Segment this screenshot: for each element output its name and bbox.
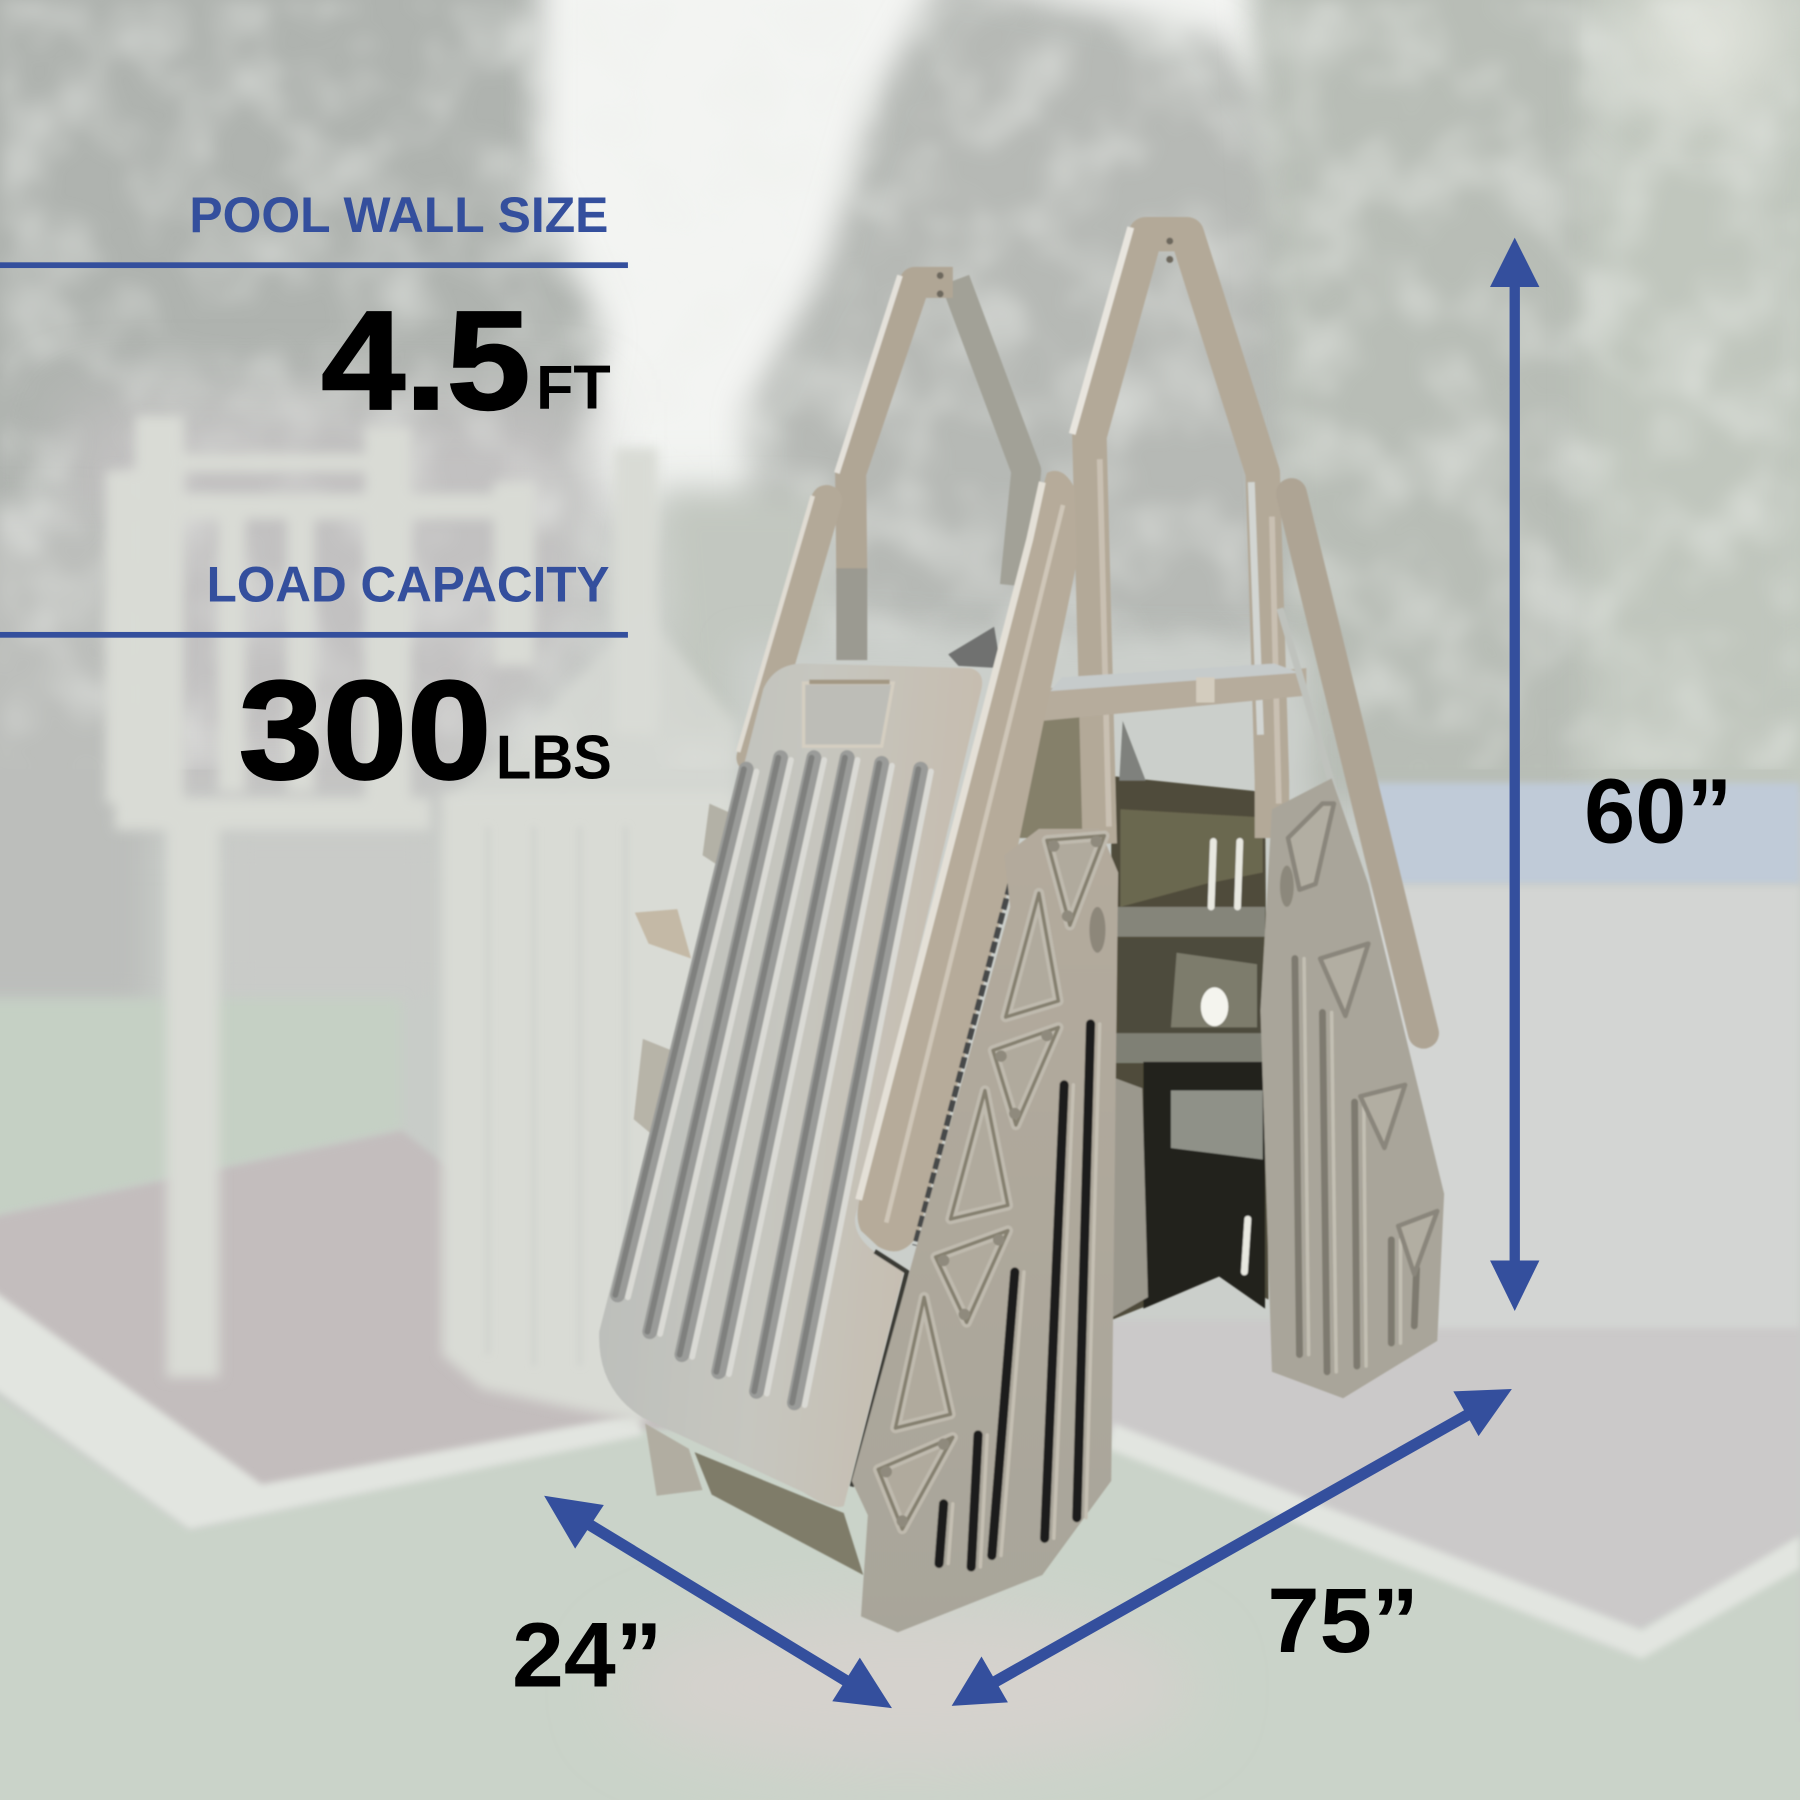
unit: lbs: LBS — [496, 723, 612, 792]
left trees — [0, 0, 603, 551]
label: height: 60” — [1584, 761, 1732, 863]
fence slats — [488, 827, 626, 1366]
spec block: load capacity — [0, 556, 628, 808]
area behind fence — [69, 402, 585, 804]
gate side mesh — [999, 712, 1091, 838]
left side handle tabs — [634, 804, 740, 1136]
spec block: pool wall size — [0, 186, 628, 439]
product: pool entry ladder — [599, 227, 1444, 1632]
front left handrail — [852, 471, 1077, 1487]
top platform step — [1042, 664, 1306, 781]
panel bolts — [880, 836, 1102, 1527]
label: width: 24” — [512, 1604, 662, 1706]
left lower hedge — [0, 505, 149, 1010]
right edge underlay — [1745, 0, 1800, 792]
pool water — [1372, 783, 1800, 884]
mulch left — [0, 1131, 712, 1504]
sandy patch — [620, 1607, 1194, 1768]
front foot panel — [852, 829, 1118, 1632]
heading: pool wall size: POOL WALL SIZE — [189, 186, 608, 243]
white fence and deck — [106, 416, 735, 1423]
right arm — [1280, 494, 1423, 1033]
centre tree — [746, 0, 1309, 654]
value: 4.5: 4.5 — [321, 282, 530, 439]
gate hardware — [948, 627, 1001, 668]
pool wall — [1372, 886, 1800, 1328]
right trees — [1246, 0, 1607, 804]
value: 300: 300 — [239, 651, 491, 808]
bottom underlay — [0, 1722, 1800, 1800]
heading: load capacity: LOAD CAPACITY — [207, 556, 610, 613]
rule — [0, 262, 628, 268]
label: depth: 75” — [1267, 1570, 1419, 1672]
gate ribs — [615, 758, 931, 1405]
ground right — [1033, 1320, 1800, 1630]
central dark ladder frame — [1111, 776, 1268, 1320]
dimension arrow: height 60 in — [1490, 238, 1539, 1311]
foliage mottling — [0, 0, 1800, 769]
sky — [459, 0, 1309, 505]
panel triangular embosses — [878, 836, 1104, 1529]
rule — [0, 632, 628, 638]
back left arm — [738, 496, 827, 758]
dimension arrow: depth 75 in — [952, 1389, 1512, 1706]
behind ladder — [735, 643, 1309, 1378]
panel slots — [939, 1024, 1091, 1567]
right foot panel — [1260, 778, 1444, 1398]
folding gate panel — [599, 664, 982, 1507]
area under deck — [218, 827, 442, 999]
grass — [0, 1320, 1800, 1800]
right corner glow — [1630, 0, 1791, 115]
lawn left — [0, 999, 402, 1240]
back arch frame — [837, 272, 1026, 660]
dimension arrow: width 24 in — [544, 1496, 892, 1708]
mid trees — [660, 494, 827, 735]
white pad borders — [0, 1246, 643, 1529]
gate hinge base — [645, 1423, 863, 1575]
front arch frame — [1072, 227, 1279, 844]
unit: ft: FT — [536, 354, 611, 423]
